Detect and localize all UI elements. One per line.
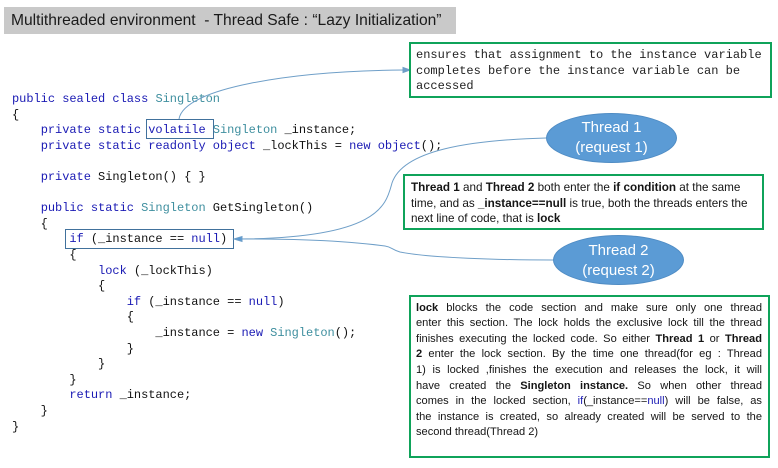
arrow: thread 1 to if condition [238,138,546,239]
callout: lock explanation: 2 enter the lock section. By the time one thread(for eg : Thread [416,348,762,360]
singleton code block: if (_instance == null) [69,232,227,246]
callout: both threads enter if [403,174,764,230]
oval: thread 2: Thread 2 [588,242,649,259]
singleton code block: } [12,420,19,434]
singleton code block: { [98,279,105,293]
callout: volatile explanation: ensures that assignment to the instance variable [416,48,762,62]
callout: lock explanation [409,295,770,458]
arrow: thread 2 to if condition [234,236,553,260]
callout: lock explanation: lock blocks the code section and make sure only one thread [416,302,762,314]
oval: thread 1: Thread 1 [581,119,642,136]
singleton code block [12,92,442,434]
callout: lock explanation: the instance is created, so already created will be served to the [416,411,762,423]
callout: volatile explanation [409,42,772,98]
singleton code block: if (_instance == null) [127,295,285,309]
singleton code block: { [69,248,77,262]
callout: lock explanation: enter this section. The lock holds the exclusive lock till the thread [416,317,762,329]
callout: volatile explanation: accessed [416,78,474,92]
callout: lock explanation: 1) is locked ,finishes the execution and releases the lock, it will [416,364,762,376]
singleton code block: lock (_lockThis) [98,264,213,278]
callout: lock explanation: comes in the locked section, if(_instance==null) will be false, as [416,395,762,407]
callout: both threads enter if: next line of code, that is lock [411,212,560,224]
singleton code block: public static Singleton GetSingleton() [41,201,313,215]
singleton code block: } [98,357,105,371]
singleton code block: public sealed class Singleton [12,92,220,106]
singleton code block: { [12,108,19,122]
singleton code block: private Singleton() { } [41,170,206,184]
title banner [4,7,456,34]
singleton code block: } [127,342,134,356]
singleton code block: private static volatile Singleton _instance; [41,123,356,137]
callout: lock explanation: finishes executing the locked code. So either Thread 1 or Thread [416,332,762,344]
highlight: outer if condition [65,229,234,249]
callout: lock explanation: have created the Singleton instance. So when other thread [416,380,762,392]
singleton code block: { [41,217,48,231]
singleton code block: { [127,310,134,324]
singleton code block: private static readonly object _lockThis = new object(); [41,139,442,153]
callout: lock explanation: second thread(Thread 2) [416,426,538,438]
singleton code block: } [41,404,48,418]
arrow: volatile to explanation [179,68,410,119]
singleton code block: _instance = new Singleton(); [155,326,356,340]
callout: both threads enter if: Thread 1 and Thread 2 both enter the if condition at the same [411,180,740,194]
oval: thread 1 [546,113,677,163]
oval: thread 2: (request 2) [582,262,655,279]
oval: thread 1: (request 1) [575,139,648,156]
callout: volatile explanation: completes before the instance variable can be [416,64,740,78]
oval: thread 2 [553,235,684,285]
highlight: volatile keyword [146,119,214,139]
singleton code block: } [69,373,77,387]
callout: both threads enter if: time, and as _instance==null is true, both the threads enters the [411,196,748,210]
title banner: Multithreaded environment - Thread Safe : “Lazy Initialization” [11,12,442,29]
singleton code block: return _instance; [69,388,191,402]
